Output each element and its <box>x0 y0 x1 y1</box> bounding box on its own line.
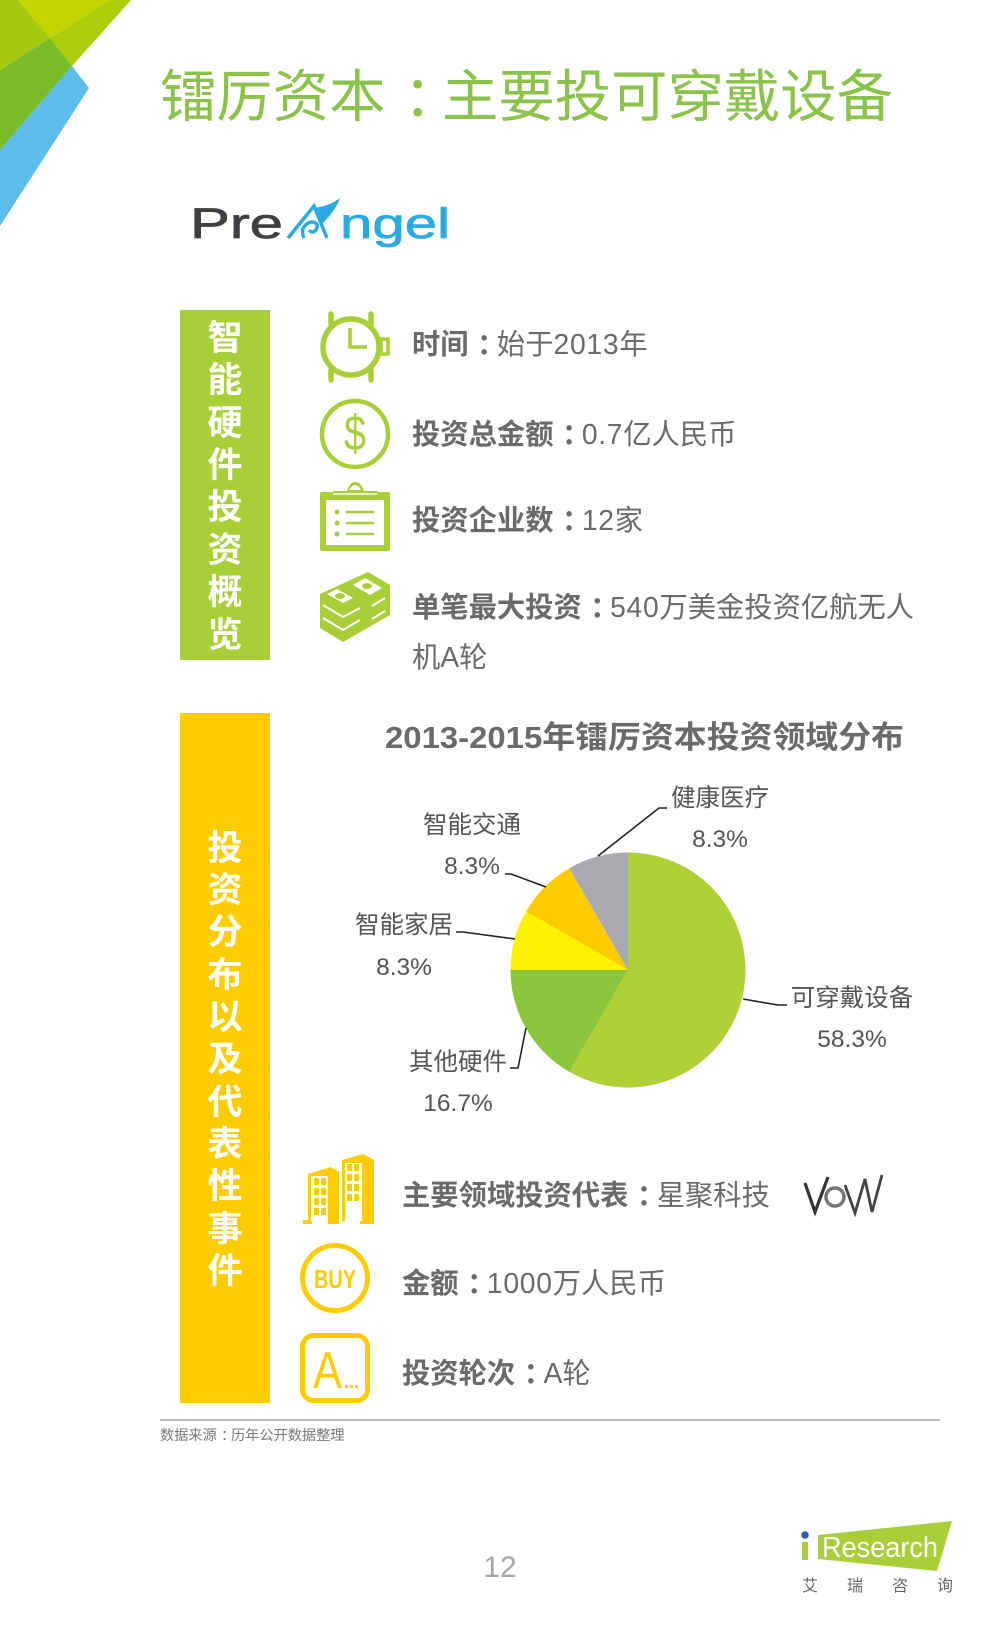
panel: hardware investment overview banner: 览 <box>207 616 243 655</box>
icon: dollar coin <box>322 401 388 467</box>
panel: hardware investment overview banner: 资 <box>207 531 243 570</box>
chart title: 2013-2015年镭厉资本投资领域分布 <box>385 720 904 755</box>
panel: distribution and events banner: 性 <box>207 1167 243 1206</box>
text: total investment: 投资总金额 ：0.7亿人民币 <box>412 418 736 450</box>
text: representative company: 主要领域投资代表 ：星聚科技 <box>402 1179 770 1211</box>
panel: hardware investment overview banner: 投 <box>207 488 243 527</box>
icon: dollar coin: $ <box>344 405 366 461</box>
icon: buildings <box>303 1154 374 1224</box>
logo: PreAngel: Pre <box>190 200 283 248</box>
label: smart transport: 智能交通 <box>423 812 521 839</box>
icon: clipboard <box>320 482 390 551</box>
panel: hardware investment overview banner: 硬 <box>207 404 243 443</box>
logo: VOW <box>805 1175 882 1213</box>
label: smart transport: 8.3% <box>444 853 500 880</box>
panel: distribution and events banner: 投 <box>207 829 243 868</box>
logo: PreAngel <box>190 198 450 248</box>
title: 镭厉资本 ：主要投可穿戴设备 <box>160 65 893 128</box>
text: largest single investment: 单笔最大投资 ：540万美金投资亿航无人 <box>412 591 914 623</box>
logo: iResearch: 瑞 <box>847 1577 863 1595</box>
logo: iResearch: 艾 <box>802 1577 818 1595</box>
text: largest single investment: 机A轮 <box>412 641 487 673</box>
panel: hardware investment overview banner: 智 <box>207 319 243 358</box>
text: time: 时间 ：始于2013年 <box>412 328 648 360</box>
icon: A round badge <box>302 1336 368 1400</box>
label: smart home: 8.3% <box>376 954 432 981</box>
label: wearable devices: 可穿戴设备 <box>791 985 913 1012</box>
panel: distribution and events banner: 事 <box>207 1210 243 1249</box>
panel: distribution and events banner: 及 <box>207 1040 243 1079</box>
page number: 12 <box>483 1551 517 1584</box>
panel: distribution and events banner <box>180 713 270 1403</box>
text: number of companies: 投资企业数 ：12家 <box>412 504 643 536</box>
panel: distribution and events banner: 以 <box>207 998 243 1037</box>
label: smart home: 智能家居 <box>355 912 453 939</box>
icon: BUY badge <box>302 1246 368 1310</box>
label: other hardware: 其他硬件 <box>409 1049 507 1076</box>
logo: iResearch: Research <box>822 1532 938 1564</box>
label: wearable devices: 58.3% <box>817 1026 887 1053</box>
icon: BUY badge: BUY <box>314 1264 356 1294</box>
panel: distribution and events banner: 资 <box>207 871 243 910</box>
icon: A round badge: A <box>313 1342 342 1400</box>
icon: money stack <box>320 572 390 642</box>
panel: distribution and events banner: 分 <box>207 913 243 952</box>
logo: iResearch <box>801 1521 953 1595</box>
panel: hardware investment overview banner: 概 <box>207 573 243 612</box>
panel: hardware investment overview banner <box>180 310 270 660</box>
panel: distribution and events banner: 代 <box>207 1083 243 1122</box>
label: other hardware: 16.7% <box>423 1090 493 1117</box>
panel: distribution and events banner: 件 <box>207 1252 243 1291</box>
label: health care: 健康医疗 <box>671 785 769 812</box>
source note: 数据来源 ：历年公开数据整理 <box>160 1428 344 1444</box>
text: investment round: 投资轮次 ：A轮 <box>402 1357 591 1389</box>
icon: watch <box>323 314 388 380</box>
panel: distribution and events banner: 布 <box>207 956 243 995</box>
panel: distribution and events banner: 表 <box>207 1125 243 1164</box>
panel: hardware investment overview banner: 能 <box>207 361 243 400</box>
decorative corner shapes <box>0 0 131 226</box>
label: health care: 8.3% <box>692 826 748 853</box>
pie chart <box>355 784 913 1117</box>
logo: iResearch: 咨 <box>892 1577 908 1595</box>
panel: hardware investment overview banner: 件 <box>207 446 243 485</box>
logo: PreAngel: ngel <box>340 200 450 248</box>
text: amount: 金额 ：1000万人民币 <box>402 1267 666 1299</box>
logo: iResearch: 询 <box>937 1577 953 1595</box>
